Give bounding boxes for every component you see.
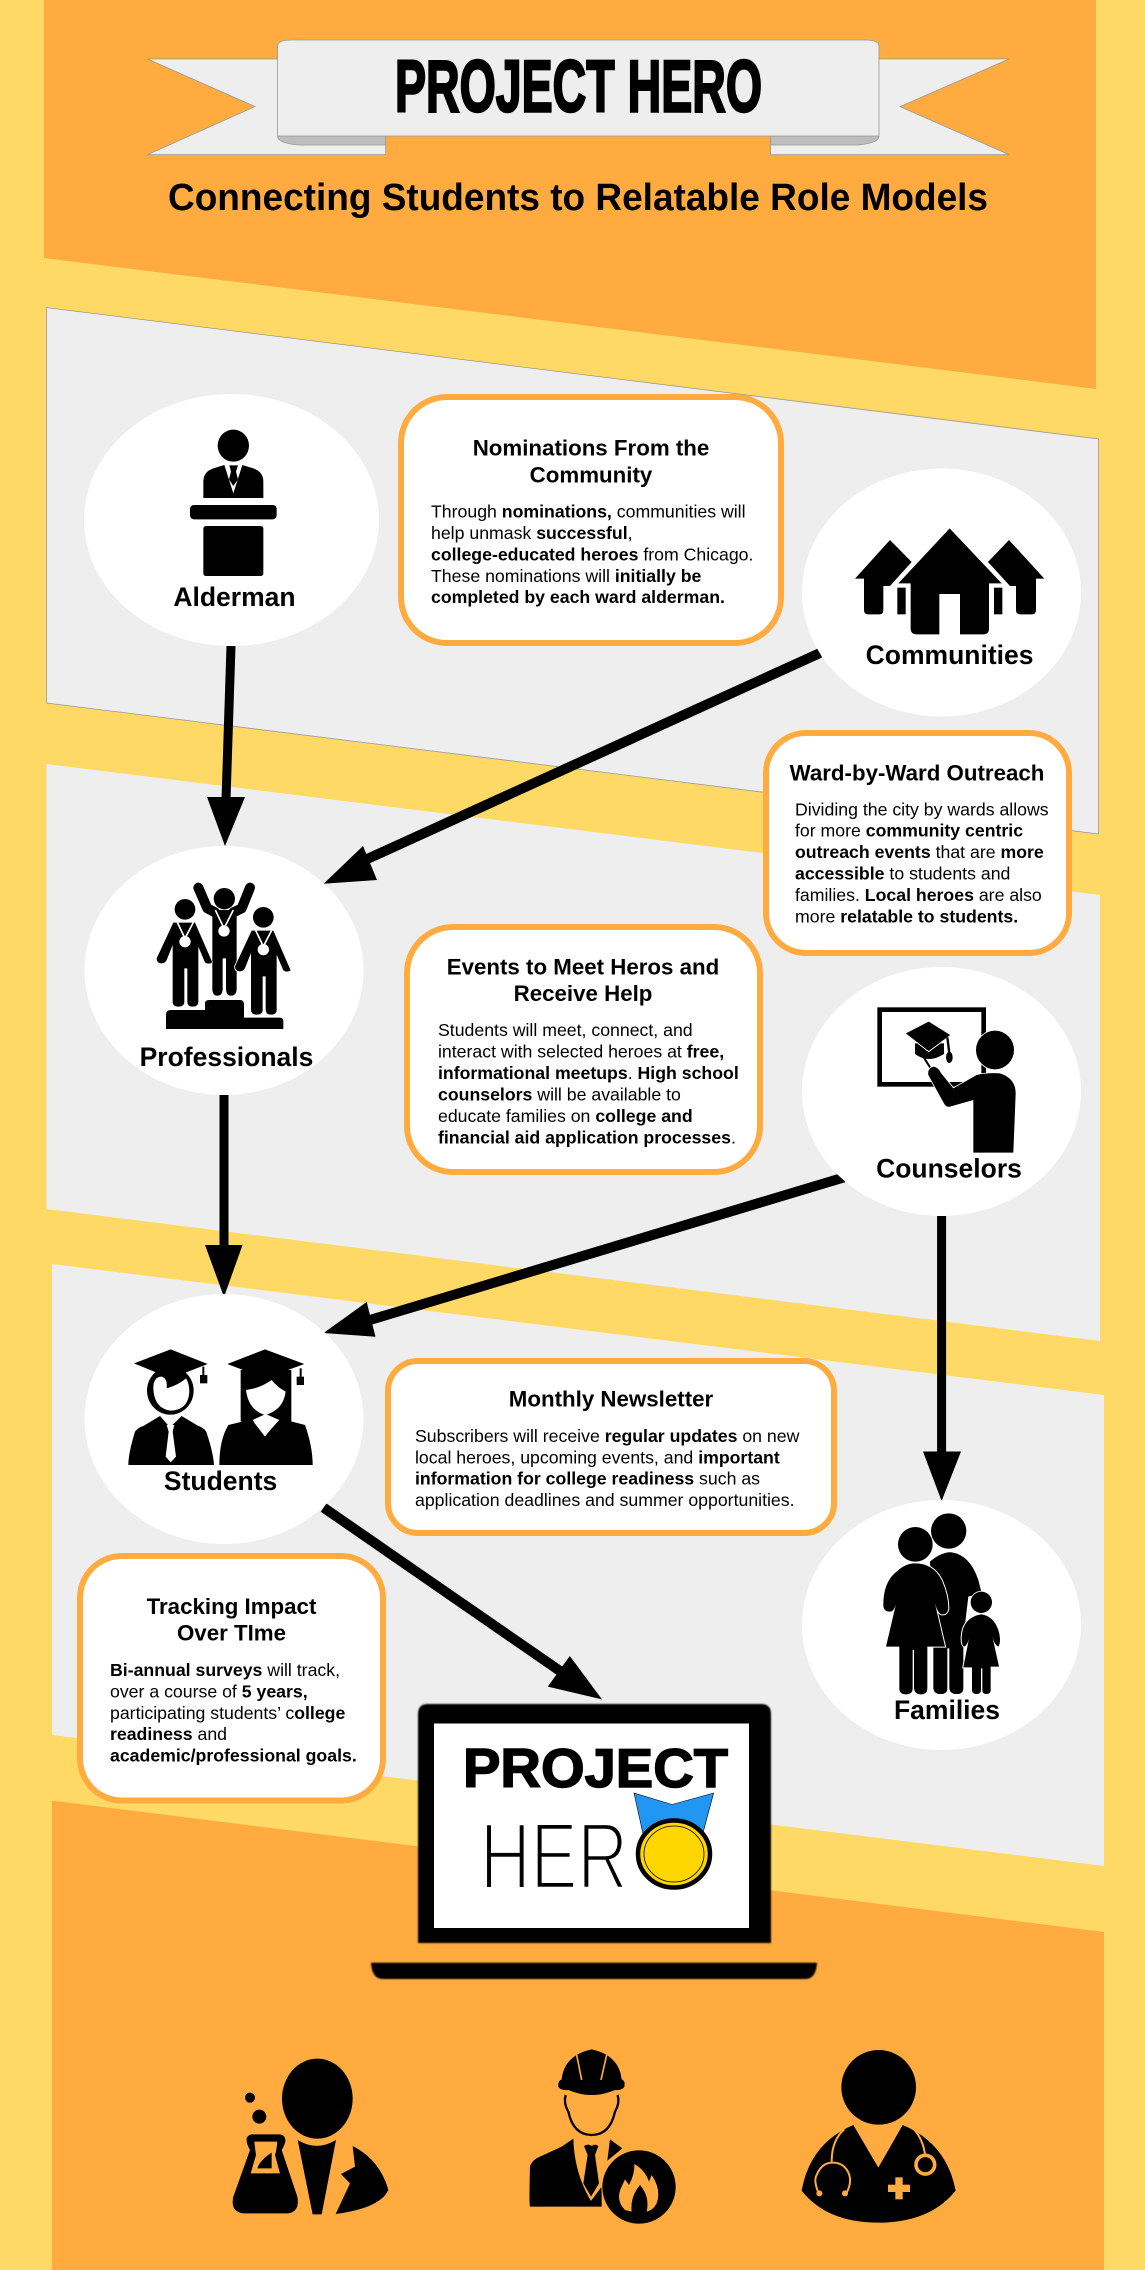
body: ward-by-ward: more relatable to students. — [795, 906, 1018, 926]
callout: nominations from the community — [401, 397, 781, 643]
panel: top orange header band — [44, 0, 1096, 389]
body: ward-by-ward: for more community centric — [795, 821, 1023, 841]
body: tracking: participating students’ college — [110, 1703, 345, 1723]
body: tracking: over a course of 5 years, — [110, 1682, 308, 1702]
title ribbon banner — [148, 40, 1009, 155]
arrow: counselors to students — [324, 1178, 844, 1337]
arrow: counselors to families — [923, 1216, 961, 1501]
body: tracking: academic/professional goals. — [110, 1745, 357, 1765]
panel: grey band two — [46, 764, 1100, 1341]
icon: alderman at lectern — [190, 430, 277, 576]
icon: graduates — [128, 1349, 313, 1465]
logo wordmark: hero: HER — [480, 1804, 628, 1910]
subtitle: Connecting Students to Relatable Role Models — [168, 177, 988, 219]
arrow: alderman to professionals — [207, 646, 245, 846]
node: counselors — [802, 967, 1081, 1216]
body: tracking: Bi-annual surveys will track, — [110, 1660, 340, 1680]
body: newsletter: information for college readiness such as — [415, 1468, 760, 1488]
body: newsletter: application deadlines and summer opportunities. — [415, 1490, 795, 1510]
icon: counselor at board — [880, 1010, 1016, 1153]
icon: doctor — [802, 2050, 956, 2223]
label: communities: Communities — [866, 640, 1034, 670]
panel: grey band one — [46, 308, 1099, 834]
icon: family — [883, 1513, 1000, 1694]
node: alderman — [84, 394, 379, 646]
body: tracking: readiness and — [110, 1724, 227, 1744]
label: students: Students — [164, 1466, 277, 1496]
heading: nominations: Nominations From the — [473, 436, 709, 461]
body: events: Students will meet, connect, and — [438, 1020, 693, 1040]
icon: professionals on podium — [157, 888, 291, 1029]
label: families: Families — [894, 1695, 1000, 1725]
node: communities — [802, 468, 1081, 716]
label: professionals: Professionals — [140, 1042, 313, 1072]
body: newsletter: Subscribers will receive regular updates on new — [415, 1426, 799, 1446]
body: events: educate families on college and — [438, 1106, 693, 1126]
node: professionals — [84, 846, 364, 1095]
node: students — [84, 1294, 364, 1544]
body: nominations: Through nominations, communities will — [431, 502, 746, 522]
body: ward-by-ward: outreach events that are more — [795, 842, 1044, 862]
heading: nominations: Community — [530, 463, 653, 488]
body: events: financial aid application processes. — [438, 1127, 736, 1147]
icon: medal — [634, 1793, 714, 1888]
arrow: communities to professionals — [324, 653, 820, 884]
label: counselors: Counselors — [876, 1154, 1022, 1184]
body: nominations: help unmask successful, — [431, 523, 633, 543]
title: PROJECT HERO — [395, 44, 762, 128]
logo wordmark: project: PROJECT — [463, 1737, 728, 1799]
body: newsletter: local heroes, upcoming events, and important — [415, 1447, 780, 1467]
callout: tracking impact — [80, 1556, 383, 1800]
node: families — [802, 1500, 1081, 1750]
arrow: students to project hero site — [324, 1508, 602, 1699]
body: ward-by-ward: Dividing the city by wards allows — [795, 799, 1049, 819]
icon: firefighter engineer — [529, 2049, 676, 2224]
callout: events to meet heros — [407, 927, 760, 1172]
heading: tracking: Over TIme — [177, 1620, 286, 1646]
body: events: interact with selected heroes at free, — [438, 1042, 724, 1062]
callout: ward-by-ward outreach — [766, 733, 1069, 953]
heading: newsletter: Monthly Newsletter — [509, 1387, 714, 1412]
icon: scientist — [233, 2059, 388, 2214]
body: events: informational meetups. High school — [438, 1063, 739, 1083]
body: nominations: These nominations will initially be — [431, 566, 701, 586]
heading: events: Receive Help — [514, 981, 652, 1006]
body: ward-by-ward: accessible to students and — [795, 864, 1010, 884]
label: alderman: Alderman — [173, 582, 296, 612]
heading: events: Events to Meet Heros and — [447, 954, 719, 980]
laptop with project hero logo — [371, 1704, 817, 1979]
body: events: counselors will be available to — [438, 1084, 681, 1104]
body: ward-by-ward: families. Local heroes are also — [795, 885, 1042, 905]
body: nominations: completed by each ward alderman. — [431, 587, 725, 607]
panel: bottom orange band — [52, 1801, 1104, 2270]
panel: grey band three — [52, 1264, 1104, 1866]
arrow: professionals to students — [205, 1095, 242, 1297]
callout: monthly newsletter — [388, 1361, 834, 1533]
icon: houses — [855, 528, 1044, 634]
heading: ward-by-ward: Ward-by-Ward Outreach — [790, 761, 1044, 786]
body: nominations: college-educated heroes from Chicago. — [431, 544, 753, 564]
heading: tracking: Tracking Impact — [147, 1594, 317, 1619]
